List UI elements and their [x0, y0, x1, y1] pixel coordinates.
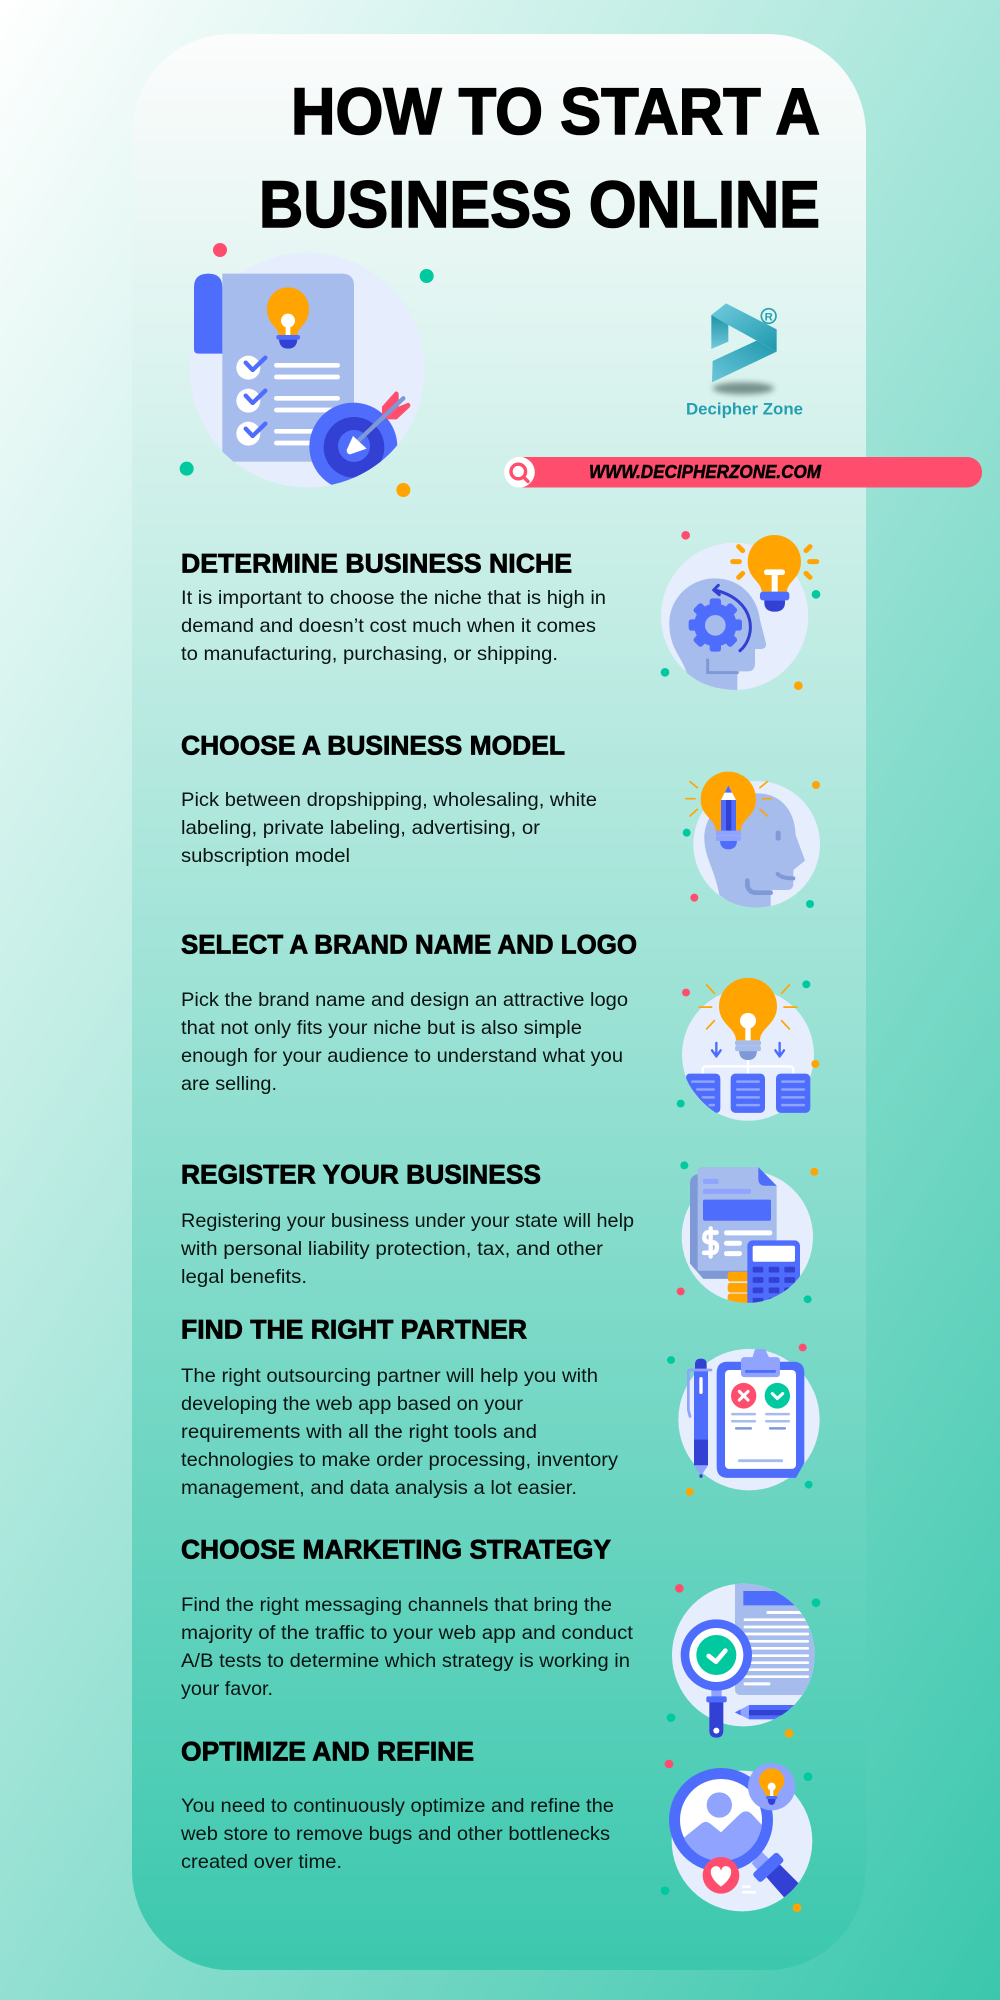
title	[259, 74, 820, 241]
section: find the right partner	[181, 1314, 618, 1499]
icon: invoice and calculator	[677, 1161, 818, 1312]
section: choose a business model	[181, 730, 597, 867]
icon: head with pencil bulb	[683, 772, 820, 908]
body text: Pick between dropshipping, wholesaling, white	[181, 789, 597, 811]
body text	[180, 1795, 614, 1873]
body text: created over time.	[181, 1851, 342, 1873]
body text	[181, 1594, 634, 1700]
website search bar: WWW.DECIPHERZONE.COM	[589, 462, 822, 482]
title: BUSINESS ONLINE	[259, 167, 820, 241]
icon: clipboard and pen	[667, 1344, 820, 1496]
title: HOW TO START A	[291, 74, 820, 148]
section: register your business	[180, 1160, 634, 1288]
icon: magnifier with image and heart	[661, 1760, 812, 1912]
icon: head with gear and bulb	[661, 531, 820, 690]
body text: You need to continuously optimize and refine the	[181, 1795, 614, 1817]
body text: are selling.	[181, 1073, 277, 1095]
logo: Decipher Zone: Decipher Zone	[686, 400, 803, 418]
body text	[181, 789, 597, 867]
section: choose marketing strategy: CHOOSE MARKETING STRATEGY	[181, 1534, 611, 1564]
body text: Registering your business under your state will help	[181, 1210, 634, 1232]
main rounded panel	[132, 34, 866, 1970]
logo: Decipher Zone	[686, 303, 803, 418]
body text: technologies to make order processing, inventory	[181, 1449, 618, 1471]
body text: enough for your audience to understand what you	[181, 1045, 623, 1067]
body text: management, and data analysis a lot easier.	[181, 1477, 577, 1499]
body text: Pick the brand name and design an attractive logo	[181, 989, 628, 1011]
section: optimize and refine: OPTIMIZE AND REFINE	[181, 1736, 474, 1766]
body text: that not only fits your niche but is also simple	[181, 1017, 582, 1039]
body text	[181, 989, 628, 1095]
body text	[181, 1365, 618, 1499]
section: determine business niche: DETERMINE BUSINESS NICHE	[181, 548, 572, 578]
body text: legal benefits.	[181, 1266, 307, 1288]
body text	[180, 1210, 634, 1288]
website search bar	[504, 457, 982, 488]
body text: subscription model	[181, 845, 350, 867]
body text: labeling, private labeling, advertising, or	[181, 817, 541, 839]
body text: requirements with all the right tools and	[181, 1421, 537, 1443]
body text: with personal liability protection, tax, and other	[180, 1238, 604, 1260]
body text: developing the web app based on your	[181, 1393, 524, 1415]
icon: checklist with target	[180, 243, 434, 497]
icon: magnifier over document	[667, 1580, 820, 1738]
body text: Find the right messaging channels that bring the	[181, 1594, 612, 1616]
section: find the right partner: FIND THE RIGHT PARTNER	[181, 1314, 527, 1344]
section: choose a business model: CHOOSE A BUSINESS MODEL	[181, 730, 565, 760]
body text: The right outsourcing partner will help you with	[181, 1365, 598, 1387]
icon: bulb with documents	[677, 978, 819, 1121]
section: select a brand name and logo	[181, 930, 637, 1095]
body text: web store to remove bugs and other bottlenecks	[180, 1823, 610, 1845]
logo: Decipher Zone: R	[765, 311, 773, 323]
section: select a brand name and logo: SELECT A BRAND NAME AND LOGO	[181, 930, 637, 960]
section: optimize and refine	[180, 1736, 614, 1873]
body text	[181, 587, 606, 665]
section: register your business: REGISTER YOUR BUSINESS	[181, 1160, 541, 1190]
body text: your favor.	[181, 1678, 273, 1700]
section: determine business niche	[181, 548, 606, 665]
body text: majority of the traffic to your web app and conduct	[181, 1622, 634, 1644]
body text: demand and doesn’t cost much when it comes	[181, 615, 596, 637]
section: choose marketing strategy	[181, 1534, 634, 1700]
body text: A/B tests to determine which strategy is working in	[181, 1650, 630, 1672]
body text: to manufacturing, purchasing, or shipping.	[181, 643, 558, 665]
icon: search	[504, 457, 535, 488]
body text: It is important to choose the niche that is high in	[181, 587, 606, 609]
